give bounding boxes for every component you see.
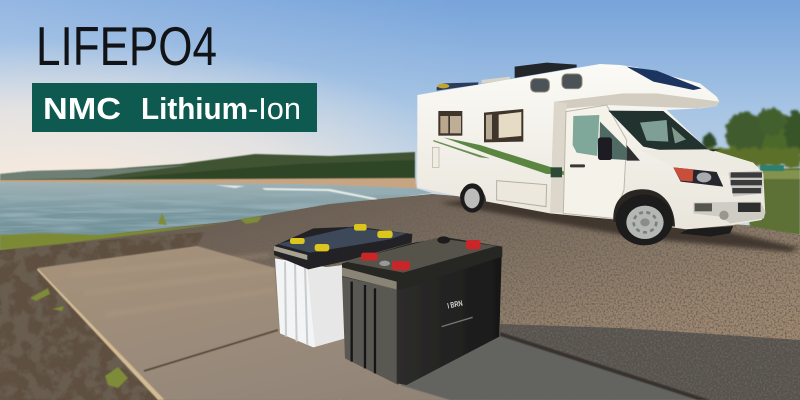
cab door xyxy=(563,105,627,218)
wheel arch xyxy=(613,189,675,227)
grass field on right xyxy=(745,168,800,235)
white battery xyxy=(274,224,412,347)
sea water xyxy=(0,182,432,254)
sky background xyxy=(0,0,800,240)
rear wheel xyxy=(460,183,486,213)
red terminals xyxy=(361,240,481,270)
upper windows xyxy=(531,74,582,92)
gravel ground xyxy=(0,194,800,400)
yellow terminals xyxy=(290,224,393,251)
tree line xyxy=(700,108,800,166)
distant wooded hill xyxy=(0,152,415,181)
front wheel xyxy=(616,195,673,245)
teal fence xyxy=(760,165,784,171)
green stripe xyxy=(433,137,607,187)
hood xyxy=(640,149,763,176)
windshield xyxy=(608,111,708,150)
banner: NMC Lithium-Ion: -Ion xyxy=(248,91,301,126)
side mirror xyxy=(598,137,612,160)
shadows on ground and slab xyxy=(400,196,800,400)
black battery xyxy=(342,236,502,385)
camper RV xyxy=(417,63,765,245)
front grille xyxy=(728,171,763,197)
overcab skylight xyxy=(627,67,702,90)
banner: NMC Lithium-Ion: NMC xyxy=(43,91,121,126)
roof cargo xyxy=(437,63,577,91)
side windows xyxy=(438,109,523,142)
storage hatch xyxy=(497,181,547,207)
battery label: I BRN xyxy=(447,299,464,311)
concrete slab xyxy=(37,246,705,400)
title: LIFEPO4: LIFEPO4 xyxy=(36,15,217,77)
beach strip xyxy=(0,178,417,189)
banner: NMC Lithium-Ion: Lithium xyxy=(141,91,248,126)
batteries xyxy=(274,224,502,385)
shoreline grass xyxy=(0,213,262,388)
banner: NMC Lithium-Ion xyxy=(32,83,317,132)
dark soil foreground xyxy=(0,232,205,400)
cab overhang underside xyxy=(555,93,719,109)
RV body shell xyxy=(417,64,765,229)
headlight xyxy=(673,167,723,187)
front bumper xyxy=(680,202,765,237)
